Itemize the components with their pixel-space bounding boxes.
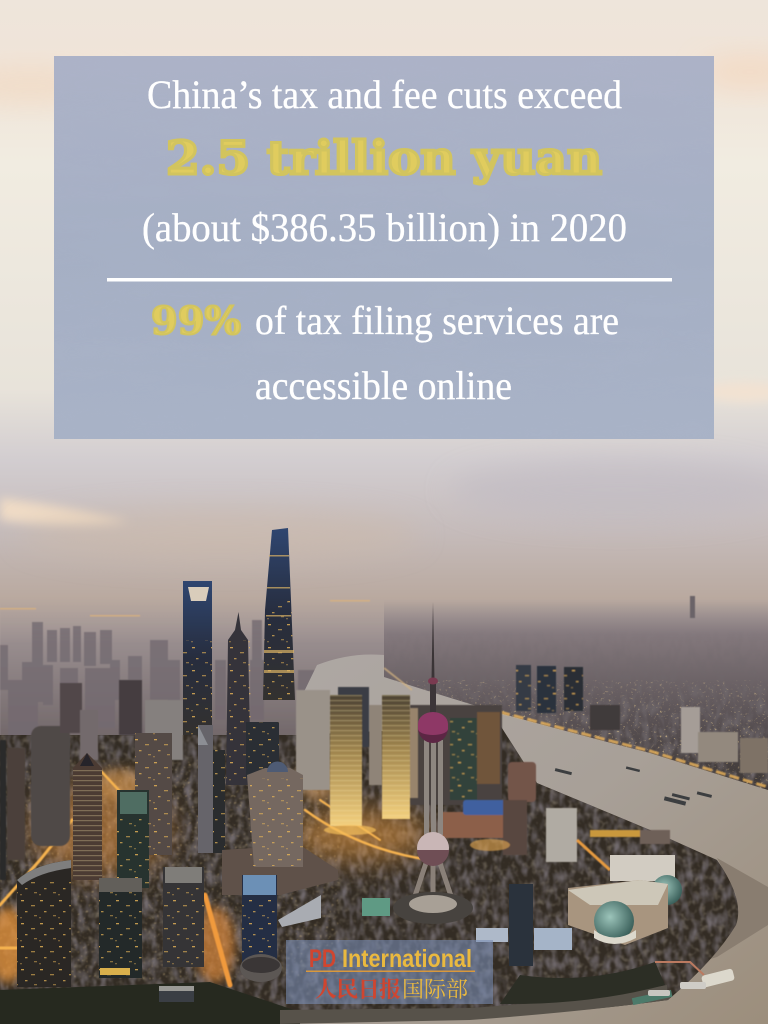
headline figure: 2.5 trillion yuan: 2.5 trillion yuan [166, 131, 602, 185]
stat: 99%: 99% [151, 298, 241, 343]
foreground towers, left [17, 722, 390, 1002]
riverside mid towers and podium [440, 712, 670, 870]
logo: PD International: PD [309, 945, 336, 973]
logo: PD International: 国际部 [402, 977, 468, 1002]
Shanghai World Financial Center [183, 581, 212, 735]
far bank buildings and riverfront lights [384, 596, 768, 795]
logo: PD International: International [342, 945, 472, 973]
dark tower and low blue buildings [476, 884, 572, 966]
street glow [0, 758, 668, 1024]
Jin Mao Tower [226, 612, 251, 785]
barges on river [501, 751, 712, 806]
logo: PD International [286, 940, 493, 1004]
hazy midrise towers, left [0, 680, 502, 880]
mud flat around the peninsula [690, 858, 768, 965]
headline line 3: (about $386.35 billion) in 2020 [142, 205, 627, 250]
city ground and Pudong peninsula [0, 725, 768, 1024]
panel: headline card [54, 56, 714, 439]
distant hazy city [0, 598, 768, 748]
divider [107, 278, 672, 282]
science museum with glass globes [568, 855, 682, 945]
stat text line 2: accessible online [255, 363, 512, 408]
bright gold towers [324, 687, 418, 835]
stat text line 1: of tax filing services are [255, 298, 619, 343]
Shanghai Tower [263, 528, 295, 700]
headline line 1: China’s tax and fee cuts exceed [147, 72, 622, 117]
photo: Shanghai Lujiazui skyline at dusk [0, 528, 768, 1024]
moored boats [632, 962, 735, 1005]
Oriental Pearl Tower [393, 602, 473, 924]
logo: PD International: 人民日报 [315, 977, 401, 1002]
blue-topped tower with round base [240, 875, 282, 982]
dark tree belt along bottom [0, 982, 300, 1024]
Huangpu river [280, 654, 768, 1024]
